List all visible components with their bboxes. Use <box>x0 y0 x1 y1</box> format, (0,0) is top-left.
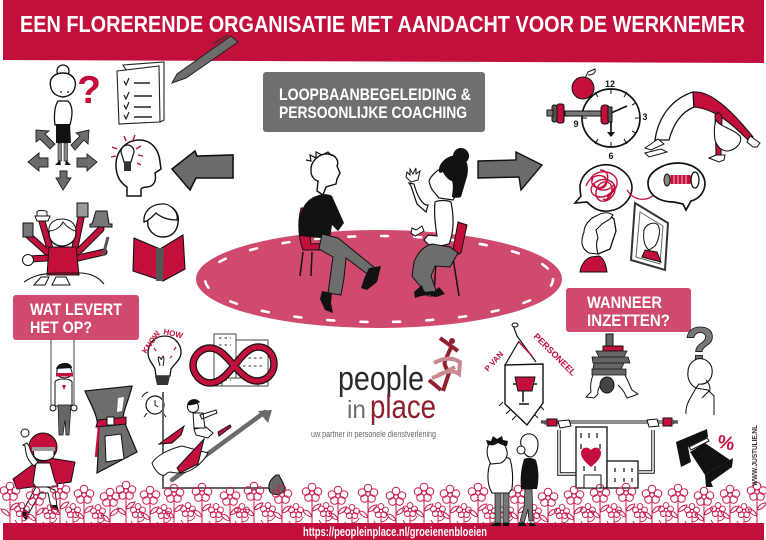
footer bar with url <box>3 523 764 540</box>
figure: pondering woman <box>686 359 714 415</box>
figure: woman on chair <box>406 148 469 298</box>
icon: thread spool bubble <box>648 163 705 210</box>
figure: building lifted as dumbbell <box>540 418 678 488</box>
figure: clock with dumbbell and apple: 9 <box>573 119 579 129</box>
figure: superhero <box>13 429 75 520</box>
figure: person on rocket hand <box>152 399 231 475</box>
label: wat levert het op: HET OP? <box>30 318 92 337</box>
icon: pennant with trophy <box>483 323 578 425</box>
icon: pennant with trophy: PERSONEEL <box>532 331 578 378</box>
figure: clock with dumbbell and apple: 3 <box>642 112 648 122</box>
label: wanneer inzetten <box>566 288 691 332</box>
stage: pink ellipse <box>196 230 562 328</box>
figure: clock with dumbbell and apple <box>547 69 648 161</box>
logo: people in place <box>311 338 460 440</box>
icon: question mark red: ? <box>77 69 101 112</box>
figure: standing couple <box>486 434 538 526</box>
icon: tangled thought bubble <box>575 165 664 211</box>
footer bar with url: https://peopleinplace.nl/groeienenbloeien <box>303 524 487 539</box>
figure: person under books <box>586 334 638 398</box>
decoration: flower meadow <box>0 481 766 536</box>
figure: twisted grey document <box>85 386 137 473</box>
chart: growth arrow and axes <box>163 392 284 495</box>
label: career coaching <box>263 72 485 132</box>
figure: person on swing <box>50 340 77 435</box>
icon: infinity over buildings <box>193 334 274 386</box>
arrow: right grey <box>478 152 542 190</box>
figure: woman with question <box>50 65 75 165</box>
icon: black bed <box>676 429 733 487</box>
icon: black question mark: ? <box>685 317 715 373</box>
logo: people in place: people <box>338 360 424 398</box>
figure: man on chair <box>299 152 381 313</box>
arrow: left grey <box>172 151 233 190</box>
label: wanneer inzetten: WANNEER <box>587 293 662 312</box>
icon: checklist <box>117 62 164 124</box>
label: career coaching: PERSOONLIJKE COACHING <box>279 103 467 122</box>
figure: clock with dumbbell and apple: 6 <box>608 151 614 161</box>
icons: direction arrows <box>28 130 97 190</box>
logo: people in place: in <box>347 396 366 424</box>
figure: multitasking person <box>22 203 112 285</box>
icon: pen <box>172 35 238 83</box>
figure: person reading red book <box>133 204 185 281</box>
icon: pennant with trophy: P VAN <box>483 350 506 373</box>
title banner <box>3 0 764 63</box>
label: wat levert het op: WAT LEVERT <box>30 300 123 319</box>
icon: percent: % <box>716 432 736 455</box>
icon: know-how lightbulb: HOW <box>163 327 184 340</box>
label: wanneer inzetten: INZETTEN? <box>587 311 670 330</box>
figure: head with lightbulb idea <box>111 135 161 196</box>
logo: people in place: place <box>370 388 436 425</box>
figure: clock with dumbbell and apple: 12 <box>605 79 615 89</box>
figure: person bending backward <box>645 92 760 162</box>
credit: www.justulie.nl: WWW.JUSTULIE.NL <box>750 425 759 486</box>
logo: people in place: uw partner in personele dienstverlening <box>311 429 436 440</box>
label: career coaching: LOOPBAANBEGELEIDING & <box>279 85 471 104</box>
figure: woman with mirror <box>580 203 668 272</box>
label: wat levert het op <box>13 295 139 340</box>
icon: alarm clock <box>142 392 166 417</box>
icon: know-how lightbulb <box>140 327 184 385</box>
icon: know-how lightbulb: KNOW <box>140 329 162 355</box>
